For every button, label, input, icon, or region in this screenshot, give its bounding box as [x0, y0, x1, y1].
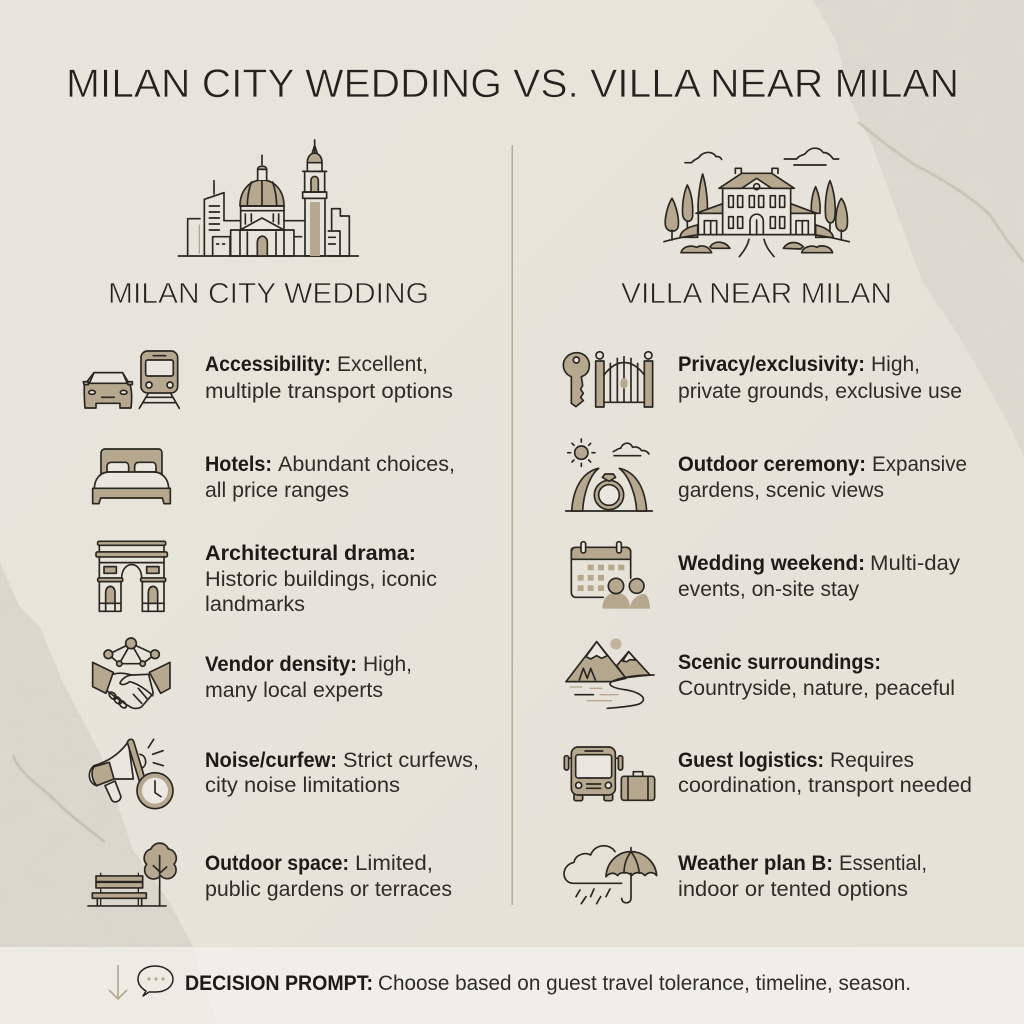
text: weather plan B: Weather plan B:	[678, 852, 833, 875]
text: outdoor space	[205, 852, 452, 901]
icon: car and train	[83, 351, 179, 408]
text: privacy	[678, 353, 962, 403]
icon: calendar and guests	[571, 542, 650, 609]
illustration: villa	[664, 148, 849, 257]
icon: bench and tree	[88, 843, 176, 906]
text: guest logistics	[678, 749, 972, 797]
panel: decision prompt	[109, 965, 911, 999]
text: outdoor ceremony: Expansive	[872, 453, 967, 476]
row: guest logistics	[564, 747, 972, 801]
text: hotels	[205, 453, 455, 502]
text: decision prompt: Choose based on guest travel tolerance, timeline, season.	[378, 972, 911, 995]
text: accessibility	[205, 353, 453, 403]
text: weather plan B	[678, 852, 927, 901]
row: noise and curfew	[89, 739, 479, 809]
text: architectural drama: landmarks	[205, 593, 305, 616]
text: outdoor space: Outdoor space:	[205, 852, 349, 875]
text: noise and curfew	[205, 749, 479, 797]
row: outdoor space	[88, 843, 452, 906]
row: hotels	[93, 449, 455, 504]
row: privacy	[563, 352, 962, 407]
text: architectural drama: Architectural drama:	[205, 542, 416, 565]
row: wedding weekend	[571, 542, 961, 609]
panel: villa near Milan	[563, 148, 972, 904]
title: MILAN CITY WEDDING VS. VILLA NEAR MILAN	[66, 62, 959, 106]
icon: sun, cloud and ring	[566, 439, 652, 511]
marble patch: top right	[814, 0, 1024, 456]
text: noise and curfew: Noise/curfew:	[205, 749, 337, 772]
icon: megaphone and clock	[89, 739, 173, 809]
heading: Milan city wedding: MILAN CITY WEDDING	[108, 278, 429, 310]
row: outdoor ceremony	[566, 439, 967, 511]
icon: mountains and river	[566, 638, 654, 708]
text: wedding weekend: Wedding weekend:	[678, 552, 865, 575]
text: architectural drama	[205, 542, 437, 616]
text: outdoor ceremony	[678, 453, 967, 502]
icon: speech bubble	[138, 966, 173, 996]
row: weather plan B	[564, 846, 927, 904]
text: architectural drama: Historic buildings, iconic	[205, 568, 437, 591]
icon: bed	[93, 449, 170, 504]
text: weather plan B: Essential,	[839, 852, 927, 875]
row: architectural drama	[96, 541, 437, 616]
text: weather plan B: indoor or tented options	[678, 878, 908, 901]
bottom band background	[0, 947, 1024, 1024]
arrow: down	[109, 965, 127, 999]
text: wedding weekend: Multi-day	[870, 552, 961, 575]
icon: triumphal arch	[96, 541, 167, 611]
text: outdoor ceremony: Outdoor ceremony:	[678, 453, 866, 476]
panel: Milan city wedding	[83, 140, 479, 906]
text: hotels: all price ranges	[205, 479, 349, 502]
text: privacy: High,	[871, 353, 920, 376]
text: hotels: Abundant choices,	[278, 453, 455, 476]
text: accessibility: Accessibility:	[205, 353, 331, 376]
text: vendor density: many local experts	[205, 679, 383, 702]
row: accessibility	[83, 351, 453, 408]
text: guest logistics: Guest logistics:	[678, 749, 824, 772]
text: noise and curfew: Strict curfews,	[343, 749, 479, 772]
text: scenic surroundings: Countryside, nature, peaceful	[678, 677, 955, 700]
text: scenic surroundings: Scenic surroundings:	[678, 651, 881, 674]
text: hotels: Hotels:	[205, 453, 272, 476]
row: vendor density	[93, 638, 412, 709]
icon: network and handshake	[93, 638, 170, 709]
text: outdoor space: Limited,	[355, 852, 433, 875]
text: scenic surroundings	[678, 651, 955, 700]
text: outdoor ceremony: gardens, scenic views	[678, 479, 884, 502]
row: scenic surroundings	[566, 638, 955, 708]
marble patch: bottom left	[0, 550, 200, 950]
text: guest logistics: coordination, transport needed	[678, 774, 972, 797]
text: vendor density: High,	[363, 653, 412, 676]
text: guest logistics: Requires	[830, 749, 914, 772]
icon: cloud and umbrella	[564, 846, 657, 904]
text: privacy: Privacy/exclusivity:	[678, 353, 865, 376]
text: wedding weekend: events, on-site stay	[678, 578, 859, 601]
text: accessibility: Excellent,	[337, 353, 428, 376]
center divider	[512, 145, 513, 905]
text: wedding weekend	[678, 552, 961, 601]
text: outdoor space: public gardens or terraces	[205, 878, 452, 901]
text: noise and curfew: city noise limitations	[205, 774, 400, 797]
illustration: Milan skyline	[178, 140, 358, 256]
heading: villa near Milan: VILLA NEAR MILAN	[621, 278, 892, 310]
text: decision prompt: DECISION PROMPT:	[185, 972, 373, 995]
icon: key and gate	[563, 352, 653, 407]
text: vendor density	[205, 653, 412, 702]
text: accessibility: multiple transport options	[205, 380, 453, 403]
text: vendor density: Vendor density:	[205, 653, 357, 676]
text: privacy: private grounds, exclusive use	[678, 380, 962, 403]
icon: bus and suitcase	[564, 747, 655, 801]
